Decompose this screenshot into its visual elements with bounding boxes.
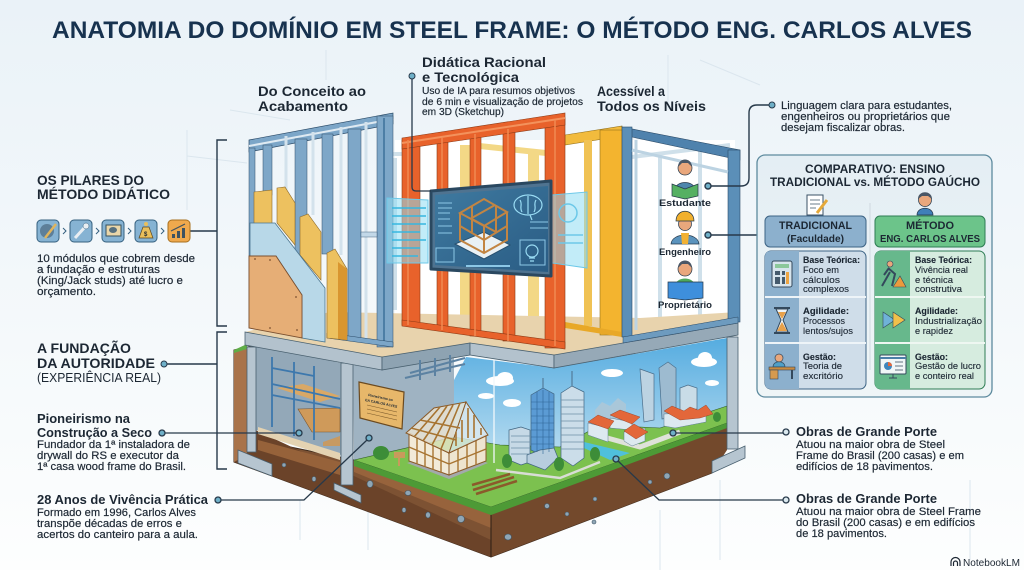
icon: money bag (135, 220, 157, 242)
heading: do conceito ao acabamento: Do Conceito ao (258, 83, 366, 99)
text: base teorica metodo: Base Teórica: (915, 255, 972, 265)
text: 10 modulos: 10 módulos que cobrem desde (37, 253, 195, 265)
plaque: EA CARLOS ALVES (365, 398, 398, 409)
yellow wall (565, 126, 622, 337)
icon: fast forward arrows (883, 312, 905, 328)
heading: os pilares do metodo didatico (37, 172, 170, 202)
icon: wrench (70, 220, 92, 242)
callout: 28 anos: transpõe décadas de erros e (37, 518, 182, 530)
column: tradicional: TRADICIONAL (779, 220, 852, 232)
callout: obras de grande porte 1 (796, 425, 964, 473)
callout: linguagem clara (769, 100, 952, 134)
icon: worker (882, 261, 906, 287)
houses (588, 405, 713, 446)
callout: didatica racional e tecnologica: em 3D (Sketchup) (422, 107, 504, 118)
callout: obras de grande porte 2: do Brasil (200 casas) e em edifícios (796, 517, 976, 529)
heading: a fundacao da autoridade: DA AUTORIDADE (37, 355, 155, 371)
icon: desk (769, 354, 795, 379)
plaque: Pioneirismo ao (368, 393, 393, 402)
far towers (640, 362, 697, 422)
text: gestao metodo: Gestão de lucro (915, 361, 981, 371)
text: 10 modulos: a fundação e estruturas (37, 264, 161, 276)
panel: comparativo (757, 155, 992, 397)
soil block (234, 344, 727, 557)
text: gestao metodo (915, 352, 981, 381)
connector: obras 2 (613, 456, 789, 503)
callout: obras de grande porte 1: Atuou na maior obra de Steel (796, 439, 945, 451)
title: ANATOMIA DO DOMÍNIO EM STEEL FRAME: O MÉTODO ENG. CARLOS ALVES (52, 16, 972, 44)
callout: didatica racional e tecnologica: Uso de IA para resumos objetivos (422, 86, 575, 97)
callout: pioneirismo: Fundador da 1ª instaladora de (37, 439, 190, 451)
callout: pioneirismo: drywall do RS e executor da (37, 450, 180, 462)
text: 10 modulos (37, 253, 195, 298)
text: gestao: Gestão: (803, 352, 836, 362)
floor slab (245, 312, 738, 380)
text: agilidade metodo: Industrialização (915, 316, 982, 326)
text: gestao metodo: e conteiro real (915, 371, 974, 381)
callout: pioneirismo (37, 412, 190, 473)
callout: pioneirismo: 1ª casa wood frame do Brasil. (37, 461, 186, 473)
callout: didatica racional e tecnologica: de 6 min e visualização de projetos (422, 97, 583, 108)
icon: monitor (102, 220, 124, 242)
text: agilidade metodo: e rapidez (915, 326, 954, 336)
scaffold and timber (258, 357, 340, 460)
column: metodo eng. carlos alves: MÉTODO (906, 219, 954, 232)
callout: 28 anos: Formado em 1996, Carlos Alves (37, 507, 196, 519)
icon: estudante (659, 160, 711, 209)
heading: a fundacao da autoridade: A FUNDAÇÃO (37, 339, 131, 356)
bracket: fundacao (167, 332, 227, 469)
text: 10 modulos: orçamento. (37, 286, 96, 298)
icon: proprietario (658, 260, 712, 311)
connector: obras 1 (670, 429, 789, 436)
wood frame house (394, 402, 517, 494)
heading: acessivel a todos os niveis: Acessível a (597, 83, 665, 99)
callout: linguagem clara: desejam fiscalizar obras. (781, 122, 905, 134)
callout: pioneirismo: Pioneirismo na (37, 412, 131, 426)
text: base teorica metodo: construtiva (915, 284, 962, 294)
heading: do conceito ao acabamento (258, 83, 366, 114)
heading: a fundacao da autoridade (37, 339, 167, 385)
column: metodo eng. carlos alves (875, 216, 985, 389)
callout: obras de grande porte 2: de 18 pavimentos. (796, 528, 887, 540)
icon: instructor (917, 192, 933, 215)
notebooklm logo: NotebookLM (963, 557, 1020, 569)
panel title: COMPARATIVO: ENSINO (805, 162, 945, 176)
icon: calculator (772, 261, 792, 287)
near towers (509, 386, 584, 470)
callout: pioneirismo: Construção a Seco (37, 426, 152, 440)
text: 10 modulos: (King/Jack studs) até lucro e (37, 275, 183, 287)
icon: proprietario: Proprietário (658, 300, 712, 311)
icon: presentation screen (880, 355, 906, 378)
text: agilidade (803, 306, 854, 336)
callout: obras de grande porte 2: Obras de Grande Porte (796, 492, 937, 506)
icon: money bag: $ (144, 232, 148, 238)
column: tradicional (765, 216, 866, 389)
heading: do conceito ao acabamento: Acabamento (258, 98, 348, 114)
callout: obras de grande porte 2 (796, 492, 981, 540)
callout: didatica racional e tecnologica: Didática Racional (422, 54, 546, 70)
text: base teorica: Base Teórica: (803, 255, 860, 265)
right blue wall (622, 127, 740, 343)
plaque (359, 382, 404, 429)
callout: didatica racional e tecnologica: e Tecnológica (422, 69, 519, 85)
callout: 28 anos (37, 493, 209, 541)
icon: foundation (37, 220, 59, 242)
heading: os pilares do metodo didatico: OS PILARES DO (37, 172, 144, 188)
callout: didatica racional e tecnologica (409, 54, 583, 191)
holographic panels (387, 192, 587, 268)
text: gestao: Teoria de (803, 361, 842, 371)
callout: obras de grande porte 1: Obras de Grande Porte (796, 425, 937, 439)
connectors to audience (705, 105, 769, 238)
icon: engenheiro (659, 211, 711, 258)
connector: pioneirismo (159, 430, 302, 436)
text: base teorica (803, 255, 860, 294)
callout: obras de grande porte 2: Atuou na maior obra de Steel Frame (796, 506, 981, 518)
text: base teorica: complexos (803, 284, 850, 294)
sky and city view (354, 338, 727, 515)
heading: a fundacao da autoridade: (EXPERIÊNCIA REAL) (37, 370, 161, 385)
module icons row (37, 220, 190, 242)
callout: 28 anos: acertos do canteiro para a aula. (37, 529, 198, 541)
heading: os pilares do metodo didatico: MÉTODO DIDÁTICO (37, 186, 170, 202)
text: agilidade: Agilidade: (803, 306, 849, 316)
text: base teorica metodo: Vivência real (915, 265, 968, 275)
panel title: TRADICIONAL vs. MÉTODO GAÚCHO (770, 174, 980, 189)
concrete posts and bases (238, 337, 745, 503)
text: agilidade: lentos/sujos (803, 326, 854, 336)
heading: acessivel a todos os niveis: Todos os Níveis (597, 98, 706, 114)
text: base teorica: cálculos (803, 275, 841, 285)
text: gestao metodo: Gestão: (915, 352, 948, 362)
callout: obras de grande porte 1: edifícios de 18 pavimentos. (796, 461, 933, 473)
icon: hourglass (774, 308, 790, 333)
callout: 28 anos: 28 Anos de Vivência Prática (37, 493, 209, 507)
text: base teorica metodo: e técnica (915, 275, 953, 285)
text: gestao: excritório (803, 371, 843, 381)
icon: engenheiro: Engenheiro (659, 247, 711, 258)
concrete lower walls (256, 345, 454, 462)
text: agilidade metodo: Agilidade: (915, 306, 958, 316)
tablet with 3D model (431, 181, 551, 276)
text: base teorica metodo (915, 255, 972, 294)
text: agilidade metodo (915, 306, 982, 336)
column: metodo eng. carlos alves: ENG. CARLOS ALVES (880, 233, 980, 245)
column: tradicional: (Faculdade) (787, 233, 844, 245)
icon: growth chart (168, 220, 190, 242)
orange steel frame wall (402, 113, 565, 349)
callout: obras de grande porte 1: Frame do Brasil (200 casas) e em (796, 450, 964, 462)
left steel frame wall (249, 113, 393, 347)
bracket: pilares (190, 140, 227, 326)
building illustration (234, 113, 745, 557)
text: gestao (803, 352, 843, 381)
panel title (770, 162, 980, 189)
heading: acessivel a todos os niveis (597, 83, 706, 114)
callout: linguagem clara: engenheiros ou proprietários que (781, 111, 950, 123)
icon: document and pen (807, 195, 827, 215)
icon: estudante: Estudante (659, 198, 711, 209)
text: base teorica: Foco em (803, 265, 839, 275)
text: agilidade: Processos (803, 316, 845, 326)
connector: 28 anos (215, 435, 372, 503)
callout: linguagem clara: Linguagem clara para estudantes, (781, 100, 952, 112)
interior backdrop (393, 140, 735, 318)
